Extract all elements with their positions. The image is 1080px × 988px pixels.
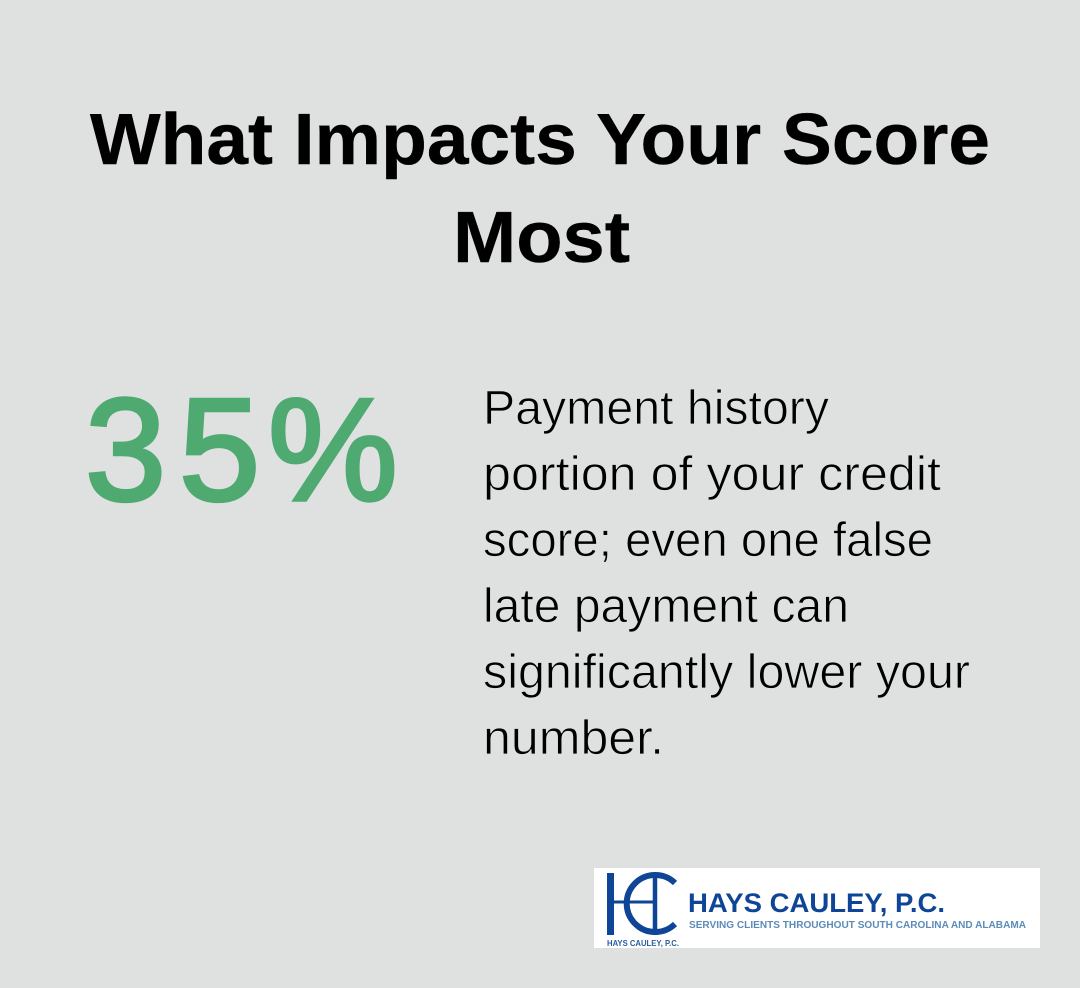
description text: number. [483,712,664,765]
company name: HAYS CAULEY, P.C. [688,888,945,918]
small logo caption: HAYS CAULEY, P.C. [607,938,679,948]
description text: late payment can [483,580,849,633]
description text: portion of your credit [483,448,941,501]
statistic: 35%: 5 [179,368,260,531]
description text: Payment history [483,382,829,435]
logo: Hays Cauley, P.C. [594,868,1040,948]
title [90,100,990,278]
description text [483,382,970,765]
statistic: 35%: 3 [85,368,166,531]
description text: significantly lower your [483,646,970,699]
statistic: 35%: % [268,368,398,531]
tagline: SERVING CLIENTS THROUGHOUT SOUTH CAROLINA AND ALABAMA [689,920,1026,931]
icon: HC monogram [610,873,675,935]
title: Most [453,198,630,278]
title: What Impacts Your Score [90,100,990,180]
description text: score; even one false [483,514,933,567]
